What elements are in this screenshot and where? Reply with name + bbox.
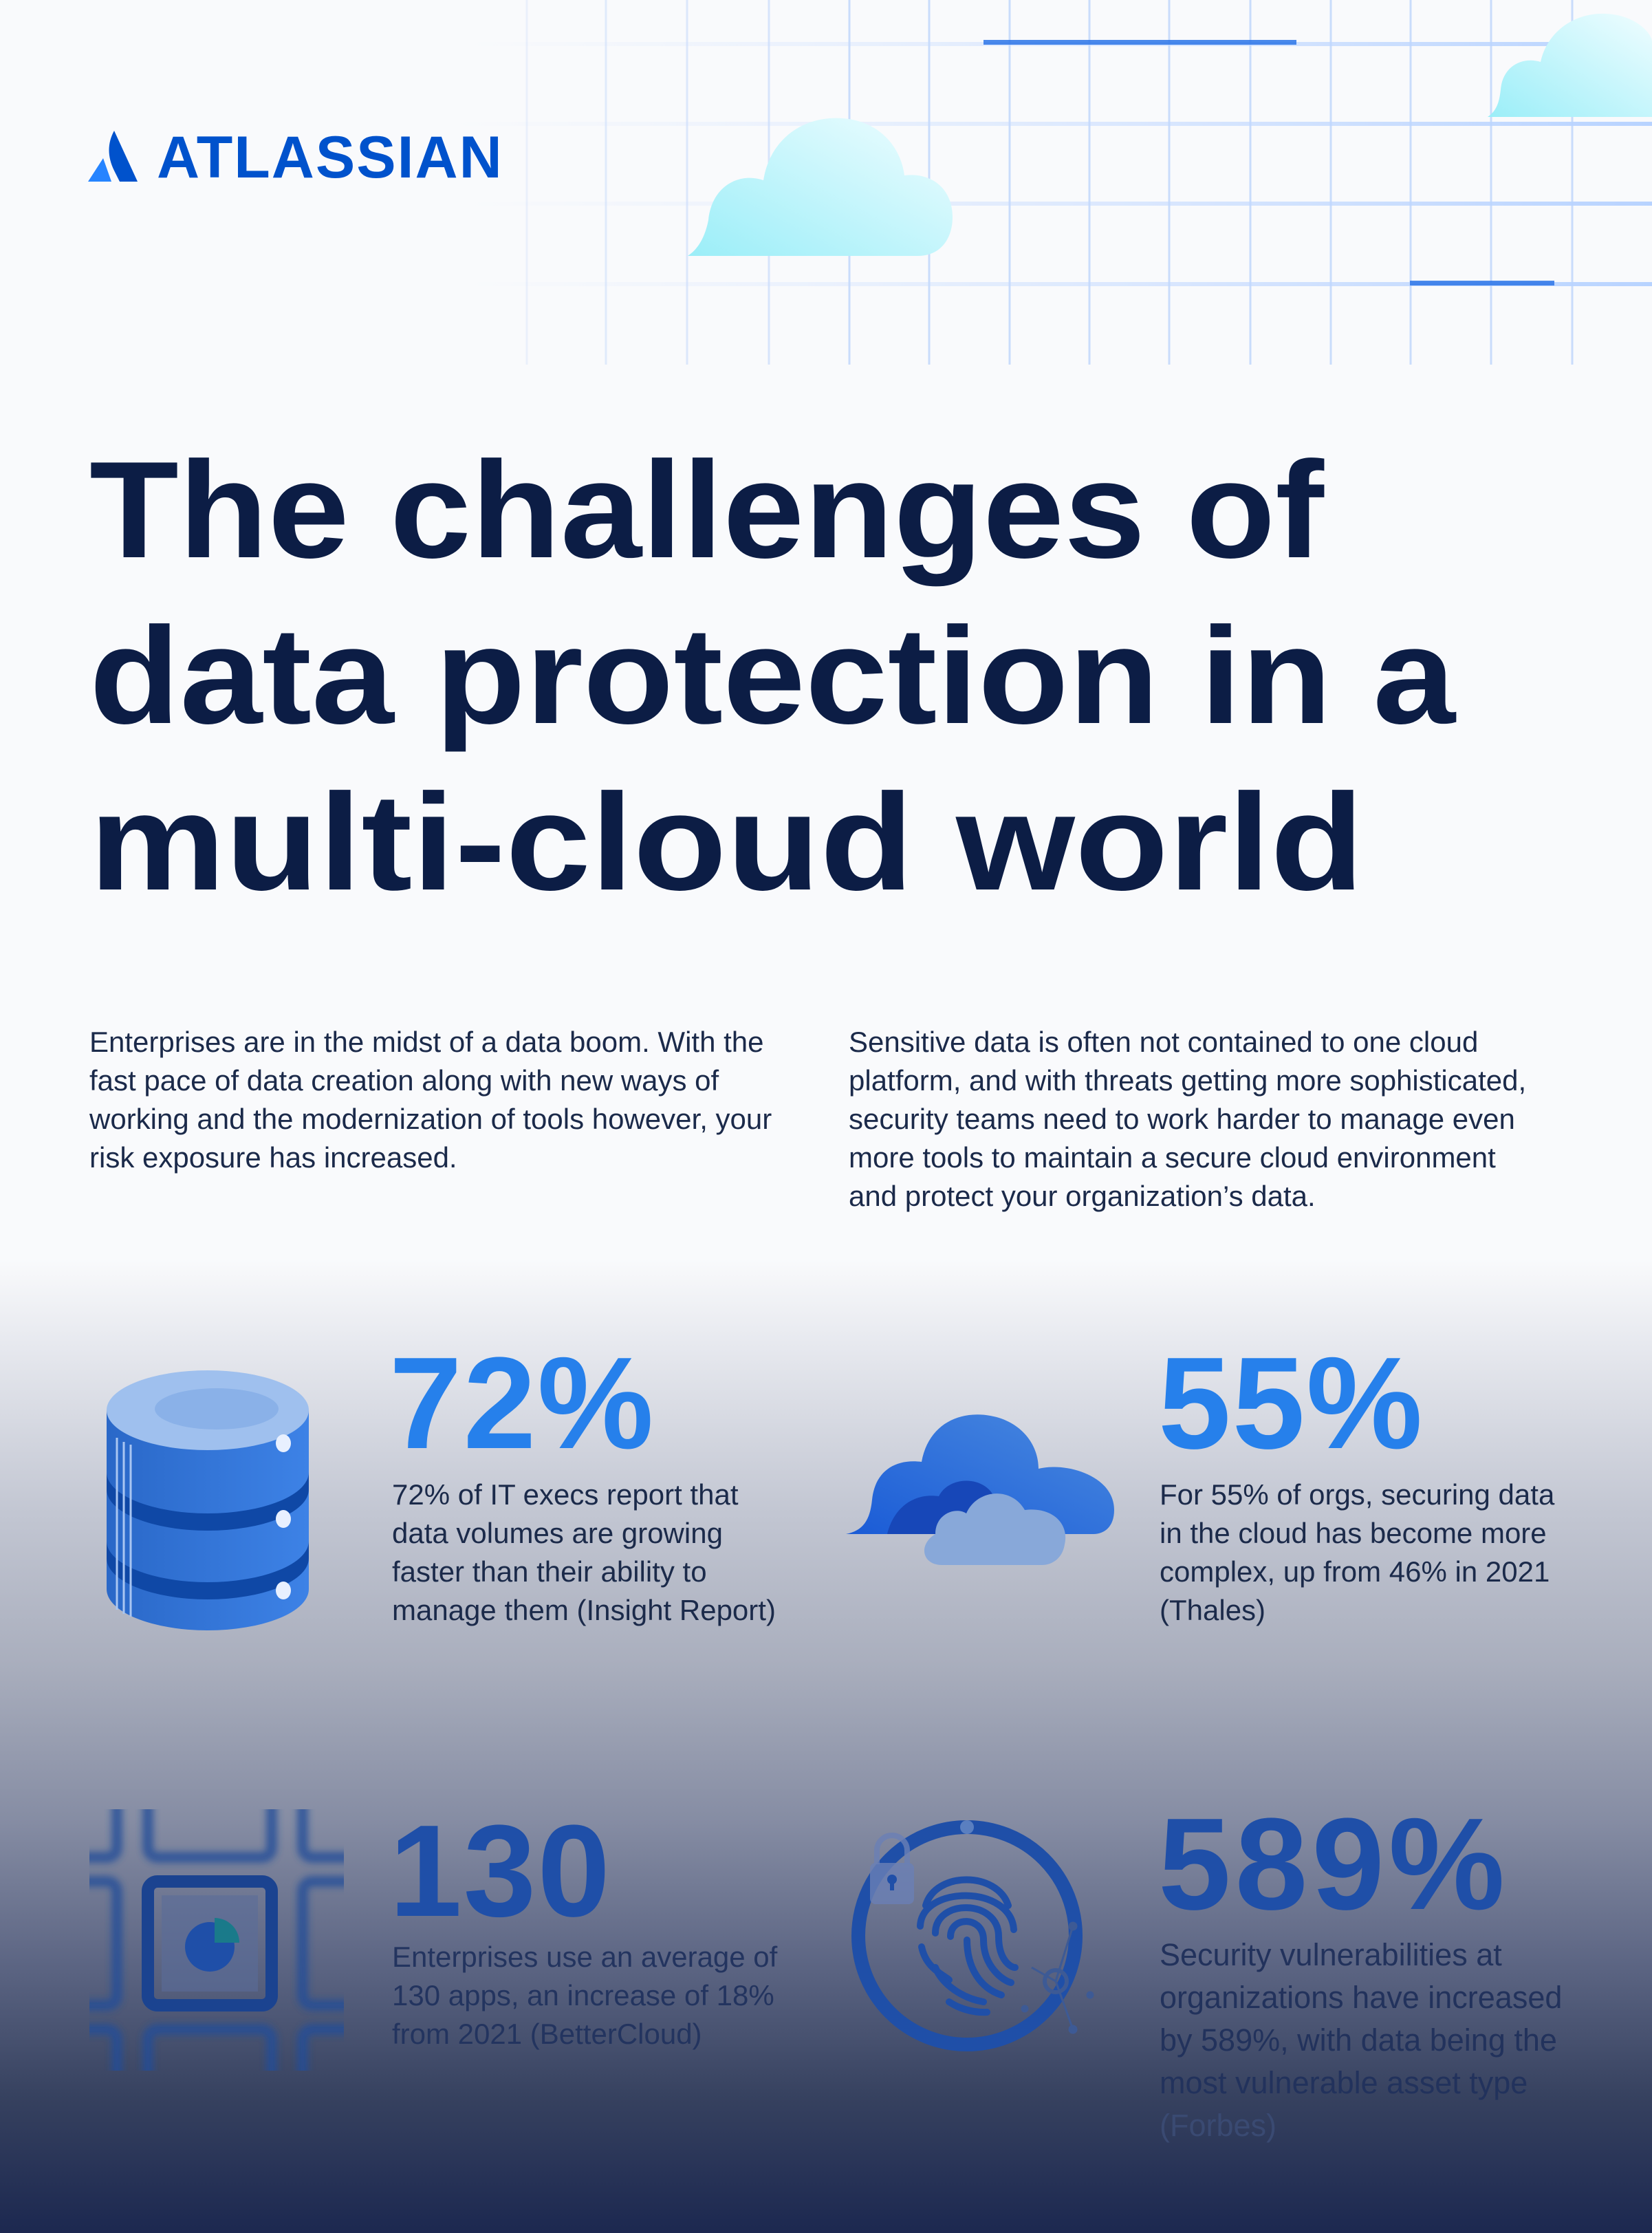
title <box>89 433 1457 919</box>
cloud left <box>688 118 953 256</box>
icon: fingerprint <box>851 1820 1094 2051</box>
title: data protection in a <box>89 599 1457 753</box>
stat: 130: Enterprises use an average of <box>392 1941 777 1973</box>
icon: clouds <box>846 1414 1114 1565</box>
stat: 55%: For 55% of orgs, securing data <box>1160 1478 1554 1511</box>
intro text right: platform, and with threats getting more sophisticated, <box>849 1064 1526 1097</box>
stat: 130: 130 <box>389 1798 611 1944</box>
stat: 589%: most vulnerable asset type <box>1160 2065 1528 2100</box>
intro text right <box>849 1026 1526 1212</box>
intro text left: Enterprises are in the midst of a data boom. With the <box>89 1026 763 1058</box>
stat: 72%: data volumes are growing <box>392 1517 723 1549</box>
stat: 55%: 55% <box>1158 1330 1424 1476</box>
intro text right: and protect your organization’s data. <box>849 1180 1316 1212</box>
intro text right: Sensitive data is often not contained to one cloud <box>849 1026 1478 1058</box>
stat: 72%: faster than their ability to <box>392 1555 707 1588</box>
stat: 55%: complex, up from 46% in 2021 <box>1160 1555 1550 1588</box>
intro text left: risk exposure has increased. <box>89 1141 457 1174</box>
logo: Atlassian: ATLASSIAN <box>157 125 503 191</box>
stat: 72%: manage them (Insight Report) <box>392 1594 776 1626</box>
stat: 55% <box>1158 1330 1554 1626</box>
background grid with clouds <box>525 0 1652 365</box>
stat: 589%: 589% <box>1158 1791 1509 1937</box>
intro text right: more tools to maintain a secure cloud environment <box>849 1141 1496 1174</box>
stat: 72%: 72% <box>389 1330 655 1476</box>
cloud right <box>1488 14 1652 117</box>
stat: 589%: organizations have increased <box>1160 1980 1562 2015</box>
stat: 55%: in the cloud has become more <box>1160 1517 1547 1549</box>
intro text left: working and the modernization of tools however, your <box>89 1103 772 1135</box>
intro text right: security teams need to work harder to manage even <box>849 1103 1515 1135</box>
stat: 589%: (Forbes) <box>1160 2108 1276 2143</box>
intro text left <box>89 1026 772 1174</box>
stat: 72%: 72% of IT execs report that <box>392 1478 739 1511</box>
stat: 130: 130 apps, an increase of 18% <box>392 1979 774 2011</box>
stat: 72% <box>389 1330 776 1626</box>
stat: 589%: Security vulnerabilities at <box>1160 1937 1502 1972</box>
stat: 55%: (Thales) <box>1160 1594 1265 1626</box>
stat: 130: from 2021 (BetterCloud) <box>392 2018 702 2050</box>
stat: 130 <box>389 1798 777 2050</box>
stat: 589% <box>1158 1791 1562 2143</box>
stat: 589%: by 589%, with data being the <box>1160 2022 1557 2058</box>
icon: database <box>107 1370 309 1630</box>
title: multi-cloud world <box>89 766 1364 919</box>
title: The challenges of <box>89 433 1324 587</box>
icon: app grid <box>89 1809 344 2071</box>
intro text left: fast pace of data creation along with new ways of <box>89 1064 719 1097</box>
